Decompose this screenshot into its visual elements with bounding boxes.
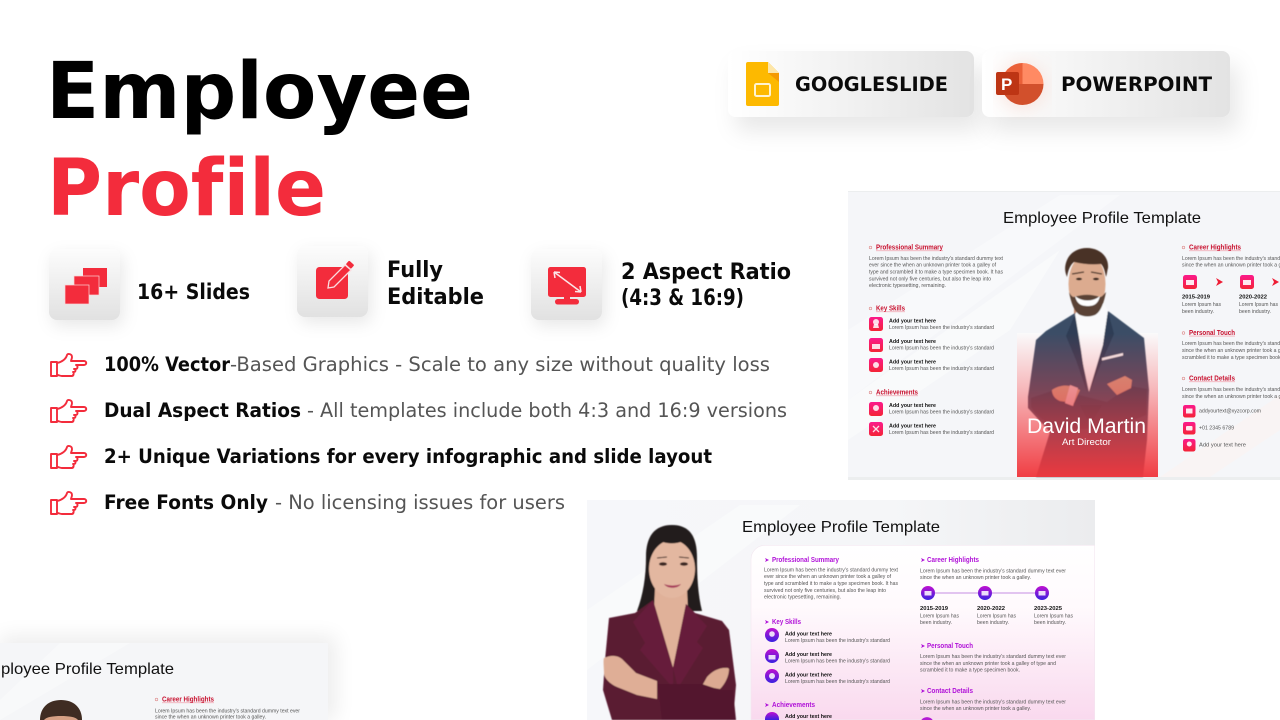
icon: powerpoint: P (1001, 75, 1012, 94)
section: professional summary: type and scrambled it to make a type specimen book. It has (764, 581, 898, 587)
section: contact details (920, 688, 1066, 720)
label (621, 260, 791, 311)
section: career highlights: been industry. (977, 620, 1009, 626)
section: career highlights: since the when an unknown printer took a galley. (920, 575, 1031, 581)
section: career highlights: been industry. (1182, 309, 1214, 315)
bullet 2: Dual Aspect Ratios (104, 399, 301, 422)
section: professional summary: survived not only five centuries, but also the leap into (869, 276, 991, 282)
section: career highlights: been industry. (920, 620, 952, 626)
section: key skills: Add your text here (785, 652, 832, 658)
badge: google slides (728, 51, 974, 117)
section: career highlights (1182, 244, 1280, 315)
man's head (40, 700, 82, 720)
bullet 1: -Based Graphics - Scale to any size without quality loss (230, 353, 770, 376)
section: professional summary: Professional Summary (772, 557, 839, 564)
badge: powerpoint (982, 51, 1230, 117)
section: contact details (1182, 376, 1280, 452)
label: Editable (387, 285, 484, 310)
section: career highlights: Lorem Ipsum has (977, 614, 1016, 620)
section: key skills (869, 306, 994, 372)
panel: bottom-center slide preview (587, 500, 1095, 720)
label: Fully (387, 258, 443, 283)
label: 16+ Slides (137, 280, 250, 305)
section: key skills: Lorem Ipsum has been the industry's standard (785, 679, 890, 685)
section: professional summary: electronic typesetting, remaining. (869, 283, 946, 289)
section: key skills: Add your text here (889, 318, 936, 324)
section: personal touch (1182, 330, 1280, 361)
label: POWERPOINT (1061, 73, 1213, 96)
section: professional summary (869, 244, 1003, 289)
section: personal touch: scrambled it to make a type specimen book. (920, 668, 1020, 674)
section: key skills: Key Skills (772, 619, 801, 626)
section: career highlights: 2020-2022 (1239, 294, 1267, 300)
title (46, 47, 473, 234)
section: professional summary: electronic typesetting, remaining. (764, 594, 841, 600)
panel: top-right slide preview (848, 191, 1280, 480)
bullet 2 (51, 399, 787, 422)
section: professional summary: Lorem Ipsum has been the industry's standard dummy text (869, 256, 1003, 262)
section: career highlights: been industry. (1239, 309, 1271, 315)
icon: edit pencil (297, 246, 368, 317)
photo: woman in maroon blazer (603, 525, 736, 720)
section: key skills: Lorem Ipsum has been the industry's standard (889, 366, 994, 372)
panel: bottom-left slide preview (0, 636, 336, 720)
name: David Martin (1027, 415, 1146, 438)
section: career highlights: Lorem Ipsum has (1182, 302, 1221, 308)
section: key skills: Key Skills (876, 306, 905, 312)
feature: aspect ratio (531, 249, 791, 320)
section: contact details: since the when an unknown printer took a galley. (920, 706, 1031, 712)
section: key skills (765, 619, 890, 685)
section: achievements: Achievements (876, 390, 918, 396)
section: career highlights: Lorem Ipsum has (1034, 614, 1073, 620)
label: 2 Aspect Ratio (621, 260, 791, 285)
bullet 4 (51, 491, 565, 514)
label (387, 258, 484, 310)
section: personal touch: Personal Touch (1189, 330, 1235, 337)
section: achievements: Lorem Ipsum has been the industry's standard (889, 410, 994, 416)
section: key skills: Add your text here (785, 632, 832, 638)
bullet 4: Free Fonts Only (104, 491, 268, 514)
label: GOOGLESLIDE (795, 73, 948, 96)
career highlights text: Lorem Ipsum has been the industry's standard dummy text ever (155, 708, 300, 714)
section: personal touch: Personal Touch (927, 643, 973, 650)
section: career highlights: 2020-2022 (977, 606, 1005, 612)
section: personal touch (920, 643, 1066, 674)
photo: man with red gradient (1017, 248, 1158, 477)
section: professional summary (764, 557, 898, 600)
section: professional summary: type and scrambled it to make a type specimen book. It has (869, 270, 1003, 276)
content card (751, 545, 1095, 720)
section: achievements: Add your text here (785, 714, 832, 720)
bullet 3: 2+ Unique Variations for every infographic and slide layout (104, 445, 712, 468)
section: personal touch: Lorem Ipsum has been the industry's standard dummy text ever (920, 654, 1066, 660)
bullet 1: 100% Vector (104, 353, 230, 376)
section: key skills: Lorem Ipsum has been the industry's standard (889, 325, 994, 331)
slide title: Employee Profile Template (1003, 210, 1201, 227)
title line 2: Profile (47, 144, 326, 234)
section: key skills: Add your text here (785, 672, 832, 678)
section: career highlights: been industry. (1034, 620, 1066, 626)
section: contact details: Contact Details (1189, 376, 1235, 382)
section: contact details: Contact Details (927, 688, 973, 695)
section: achievements (765, 702, 832, 720)
section: key skills: Add your text here (889, 339, 936, 345)
section: achievements (869, 390, 994, 436)
section: career highlights (920, 557, 1073, 626)
section: professional summary: Lorem Ipsum has been the industry's standard dummy text (764, 568, 898, 574)
section: personal touch: since the when an unknown printer took a galley of type and (920, 661, 1056, 667)
bullet list (51, 353, 787, 514)
title line 1: Employee (46, 47, 473, 137)
icon: google slides (746, 62, 779, 106)
icon: monitor with diagonal arrow (531, 249, 602, 320)
job title: Art Director (1062, 437, 1111, 447)
section: professional summary: ever since the when an unknown printer took a galley of (764, 574, 891, 580)
section: achievements: Lorem Ipsum has been the industry's standard (889, 430, 994, 436)
section: career highlights: 2023-2025 (1034, 606, 1062, 612)
section: achievements: Achievements (772, 702, 815, 709)
section: career highlights: Career Highlights (927, 557, 979, 564)
bullet 2: - All templates include both 4:3 and 16:9 versions (307, 399, 787, 422)
section: career highlights: Lorem Ipsum has (920, 614, 959, 620)
section: key skills: Add your text here (889, 360, 936, 366)
icon: stacked slides (49, 249, 120, 320)
section: professional summary: Professional Summary (876, 244, 943, 252)
section: professional summary: ever since the when an unknown printer took a galley of (869, 262, 996, 268)
section: achievements: Add your text here (889, 403, 936, 409)
section: key skills: Lorem Ipsum has been the industry's standard (889, 346, 994, 352)
section: career highlights: Lorem Ipsum has been the industry's standard dummy text ever (920, 568, 1066, 574)
section: contact details: Lorem Ipsum has been the industry's standard dummy text ever (920, 700, 1066, 706)
section: key skills: Lorem Ipsum has been the industry's standard (785, 658, 890, 664)
bullet 4: - No licensing issues for users (275, 491, 565, 514)
section: professional summary: survived not only five centuries, but also the leap into (764, 588, 886, 594)
icon: powerpoint (996, 63, 1044, 107)
feature: fully editable (297, 246, 484, 317)
section: career highlights: 2015-2019 (1182, 294, 1210, 300)
career highlights heading: Career Highlights (162, 696, 214, 704)
feature: 16+ slides (49, 249, 250, 320)
label: (4:3 & 16:9) (621, 286, 744, 311)
section: contact details: Add your text here (1199, 442, 1246, 448)
section: career highlights: 2015-2019 (920, 606, 948, 612)
slide title: Employee Profile Template (742, 519, 940, 536)
career highlights text (155, 708, 300, 720)
section: contact details: +01 2345 6789 (1199, 426, 1234, 432)
section: career highlights: Career Highlights (1189, 244, 1241, 252)
section: key skills: Lorem Ipsum has been the industry's standard (785, 638, 890, 644)
section: achievements: Add your text here (889, 424, 936, 430)
timeline (921, 586, 1049, 600)
section: contact details: addyourtext@xyzcorp.com (1199, 408, 1261, 414)
